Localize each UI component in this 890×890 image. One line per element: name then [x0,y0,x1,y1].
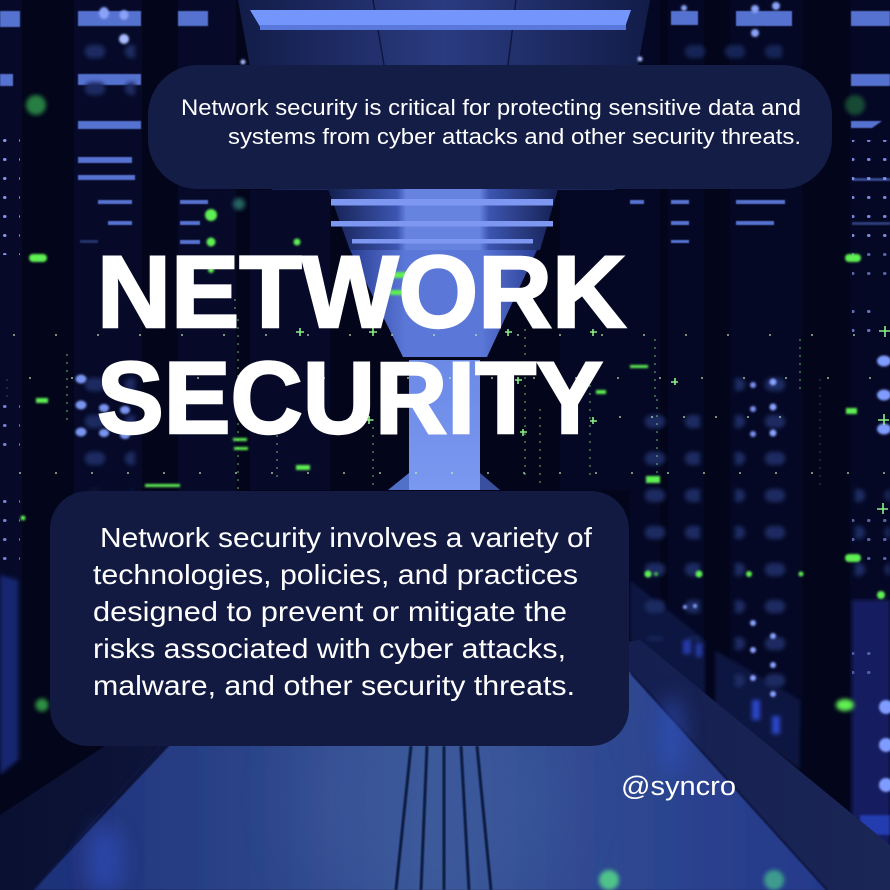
title [97,235,626,455]
corridor funnel [350,250,537,357]
text: description: risks associated with cyber attacks, [93,633,566,664]
text: description: technologies, policies, and practices [93,559,578,590]
corridor ceiling bands [328,189,558,250]
text: intro: systems from cyber attacks and other security threats. [228,124,801,149]
rack foot blue lights [683,640,780,734]
floor [0,640,890,890]
text: intro [181,95,801,149]
text: description: malware, and other security threats. [93,670,575,701]
text: description: Network security involves a variety of [100,522,592,553]
handle: @syncro [621,771,736,801]
text: description: designed to prevent or mitigate the [93,596,567,627]
dotted green matrix rows and columns [14,335,890,473]
ceiling light panel [250,10,631,30]
text: intro: Network security is critical for protecting sensitive data and [181,95,801,120]
ceiling [238,0,650,190]
left rack columns [0,0,330,760]
title: SECURITY [97,341,603,455]
corridor column [409,360,480,490]
title: NETWORK [97,235,626,349]
green LEDs [20,209,885,599]
panel: description [50,491,629,746]
right rack columns [560,0,890,860]
floor lane lines [396,746,491,890]
text: description [93,522,592,701]
lower rack blue glow [0,575,890,850]
rack highlights [0,11,890,244]
rack blurred LEDs [75,38,890,690]
floor edge shadows [33,673,827,890]
panel: intro callout [148,65,832,189]
